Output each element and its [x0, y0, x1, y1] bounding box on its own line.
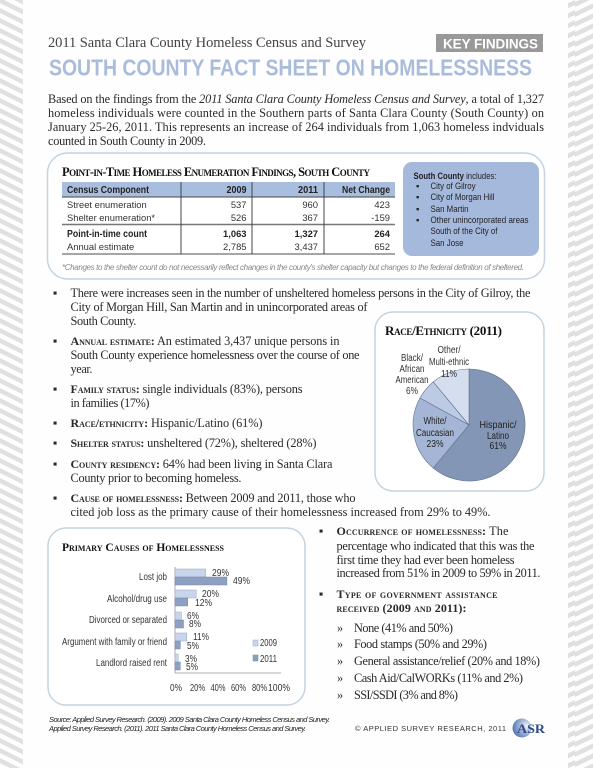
bullet: race/ethnicity: Race/ethnicity: Hispanic/Latino (61%)	[70, 416, 262, 430]
bullet: annual estimate: ▪	[53, 334, 57, 348]
value labels: 11%	[193, 632, 209, 643]
pie labels: 11%	[441, 369, 457, 380]
category labels: Divorced or separated	[89, 615, 167, 626]
enumeration table: 1,327	[295, 228, 318, 239]
intro paragraph: January 25-26, 2011. This represents an increase of 264 individuals from 1,063 homeless indviduals	[48, 120, 544, 134]
axis labels: 0%	[170, 683, 182, 694]
ASR logo: ASR	[517, 721, 546, 736]
intro paragraph	[48, 92, 544, 148]
assistance list: »	[337, 671, 343, 685]
assistance list: Food stamps (50% and 29%)	[354, 637, 487, 651]
assistance list: SSI/SSDI (3% and 8%)	[354, 688, 458, 702]
enumeration table: 264	[374, 228, 391, 239]
axes	[175, 567, 281, 673]
bullet: increases: South County.	[70, 314, 136, 328]
axis labels	[170, 683, 290, 694]
South County includes box: ▪	[416, 204, 419, 215]
pie title: Race/Ethnicity (2011)	[385, 323, 502, 338]
South County includes box: San Martin	[430, 204, 468, 215]
category labels: Alcohol/drug use	[107, 594, 167, 605]
South County includes box	[403, 162, 539, 256]
South County includes box: ▪	[416, 192, 419, 203]
enumeration table: 2011	[298, 185, 318, 196]
bullet: cause of homelessness: ▪	[53, 491, 57, 505]
South County includes box: Other unincorporated areas	[430, 215, 529, 226]
bullet: cause of homelessness: Cause of homelessness: Between 2009 and 2011, those who	[70, 491, 356, 505]
axis labels: 20%	[190, 683, 205, 694]
value labels: 29%	[212, 568, 229, 579]
panel: primary causes bar chart	[48, 528, 305, 705]
bullet: increases: There were increases seen in the number of unsheltered homeless persons in the City of Gilroy, the	[70, 286, 531, 300]
category labels: Lost job	[139, 572, 167, 583]
pie labels: Other/	[438, 345, 461, 356]
bullet: family status: ▪	[53, 382, 57, 396]
category labels: Argument with family or friend	[62, 637, 167, 648]
bullet: occurrence of homelessness: first time they had ever been homeless	[336, 553, 515, 567]
bullet: cause of homelessness	[53, 491, 490, 519]
bullet: government assistance: ▪	[319, 587, 323, 601]
pie labels: American	[396, 375, 428, 386]
legend: 2009	[260, 638, 277, 649]
axis labels: 80%	[252, 683, 267, 694]
intro paragraph: counted in South County in 2009.	[48, 134, 206, 148]
enumeration table: Shelter enumeration*	[67, 212, 155, 223]
bullet: county residency: ▪	[53, 457, 57, 471]
bullet: occurrence of homelessness: increased from 51% in 2009 to 59% in 2011.	[336, 566, 540, 580]
bullet: increases: City of Morgan Hill, San Martin and in unincorporated areas of	[70, 300, 368, 314]
enumeration table: Net Change	[342, 185, 390, 196]
bar chart title: Primary Causes of Homelessness	[62, 542, 225, 554]
value labels: 5%	[186, 662, 198, 673]
enumeration table: Annual estimate	[67, 241, 134, 252]
enumeration table: -159	[371, 212, 390, 223]
enumeration table	[62, 182, 395, 254]
South County includes box: South of the City of	[430, 226, 498, 237]
bars 2009	[175, 569, 206, 662]
value labels: 5%	[187, 641, 199, 652]
bullet: county residency: County residency: 64% had been living in Santa Clara	[70, 457, 333, 471]
bullet: government assistance	[319, 587, 540, 702]
pie labels: African	[400, 364, 424, 375]
bullet: increases: ▪	[53, 286, 57, 300]
bullet: government assistance: Type of government assistance	[336, 587, 498, 601]
enumeration table: 367	[302, 212, 318, 223]
enumeration table: 652	[374, 241, 390, 252]
bullet: cause of homelessness: cited job loss as the primary cause of their homelessness increased from 29% to 49%.	[70, 505, 490, 519]
bullet: annual estimate: South County experience homelessness over the course of one	[70, 348, 360, 362]
enumeration table: Street enumeration	[67, 199, 147, 210]
pie labels: Caucasian	[416, 428, 454, 439]
key findings badge: KEY FINDINGS	[443, 36, 538, 52]
assistance list: »	[337, 637, 343, 651]
bullet: family status: in families (17%)	[70, 396, 150, 410]
pie labels: Latino	[487, 431, 509, 442]
enumeration table: Census Component	[67, 185, 150, 196]
bullet: annual estimate	[53, 334, 360, 376]
pie labels: 23%	[426, 439, 444, 450]
value labels: 6%	[187, 611, 199, 622]
South County includes box: South County includes:	[414, 171, 496, 182]
panel: point-in-time findings	[48, 153, 544, 279]
enumeration table: Point-in-time count	[67, 229, 148, 240]
South County includes box: San Jose	[430, 238, 464, 249]
pie labels: White/	[424, 416, 447, 427]
panel: race/ethnicity pie chart	[375, 312, 544, 491]
assistance list	[337, 621, 540, 702]
value labels: 12%	[195, 598, 212, 609]
category labels	[62, 572, 167, 669]
bullet: occurrence of homelessness	[319, 524, 540, 580]
bullet: family status	[53, 382, 303, 410]
category labels: Landlord raised rent	[96, 658, 167, 669]
pie labels: Hispanic/	[480, 420, 517, 431]
source note: Applied Survey Research. (2011). 2011 Santa Clara County Homeless Census and Survey.	[48, 724, 306, 733]
bullet: county residency: County prior to becoming homeless.	[70, 471, 242, 485]
value labels: 49%	[233, 576, 250, 587]
intro paragraph: Based on the findings from the 2011 Santa Clara County Homeless Census and Survey, a total of 1,327	[48, 92, 544, 106]
legend	[253, 638, 277, 665]
assistance list: »	[337, 688, 343, 702]
enumeration table: 423	[374, 199, 390, 210]
pie labels: Multi-ethnic	[429, 357, 469, 368]
bullet: occurrence of homelessness: percentage who indicated that this was the	[336, 539, 535, 553]
enumeration table: 537	[231, 199, 246, 210]
assistance list: General assistance/relief (20% and 18%)	[354, 654, 540, 668]
bars 2011	[175, 577, 227, 670]
source note: Source: Applied Survey Research. (2009). 2009 Santa Clara County Homeless Census and Survey.	[49, 715, 330, 724]
table footnote: *Changes to the shelter count do not necessarily reflect changes in the county's shelter capacity but changes to the federal definition of sheltered.	[62, 263, 524, 272]
survey title: 2011 Santa Clara County Homeless Census and Survey	[48, 35, 367, 51]
pie labels: 6%	[406, 386, 418, 397]
assistance list: None (41% and 50%)	[354, 621, 453, 635]
bullet: government assistance: received (2009 and 2011):	[336, 601, 466, 615]
enumeration table: 3,437	[295, 241, 318, 252]
bullet: occurrence of homelessness: Occurrence of homelessness: The	[336, 524, 509, 538]
intro paragraph: homeless individuals were counted in the Southern parts of Santa Clara County (South County) on	[48, 106, 544, 120]
bullet: increases	[53, 286, 531, 328]
pie labels: Black/	[401, 353, 423, 364]
bullet: annual estimate: Annual estimate: An estimated 3,437 unique persons in	[70, 334, 340, 348]
South County includes box: ▪	[416, 215, 419, 226]
ASR logo	[512, 718, 546, 738]
enumeration table: 1,063	[223, 228, 246, 239]
axis labels: 100%	[268, 683, 290, 694]
value labels	[185, 568, 250, 673]
bullet: race/ethnicity: ▪	[53, 416, 57, 430]
South County includes box: City of Gilroy	[430, 181, 476, 192]
enumeration table: 2009	[226, 185, 247, 196]
assistance list: Cash Aid/CalWORKs (11% and 2%)	[354, 671, 523, 685]
South County includes box: City of Morgan Hill	[430, 192, 494, 203]
pie labels	[396, 345, 517, 452]
pie labels: 61%	[490, 441, 507, 452]
axis labels: 40%	[210, 683, 226, 694]
assistance list: »	[337, 654, 343, 668]
pie slices	[413, 369, 525, 481]
table title: Point-in-Time Homeless Enumeration Findings, South County	[62, 165, 371, 179]
value labels: 20%	[202, 589, 219, 600]
copyright: © APPLIED SURVEY RESEARCH, 2011	[355, 724, 506, 733]
value labels: 8%	[189, 619, 201, 630]
bullet: occurrence of homelessness: ▪	[319, 524, 323, 538]
South County includes box: ▪	[416, 181, 419, 192]
assistance list: »	[337, 621, 343, 635]
source note	[48, 715, 330, 733]
axis labels: 60%	[231, 683, 246, 694]
enumeration table: 2,785	[223, 241, 246, 252]
bullet: shelter status: Shelter status: unsheltered (72%), sheltered (28%)	[70, 436, 316, 450]
bullet: county residency	[53, 457, 333, 485]
bullet: shelter status: ▪	[53, 436, 57, 450]
legend: 2011	[260, 654, 277, 665]
enumeration table: 960	[302, 199, 318, 210]
bullet: annual estimate: year.	[70, 362, 92, 376]
bullet: family status: Family status: single individuals (83%), persons	[70, 382, 303, 396]
enumeration table: 526	[231, 212, 246, 223]
value labels: 3%	[185, 654, 197, 665]
